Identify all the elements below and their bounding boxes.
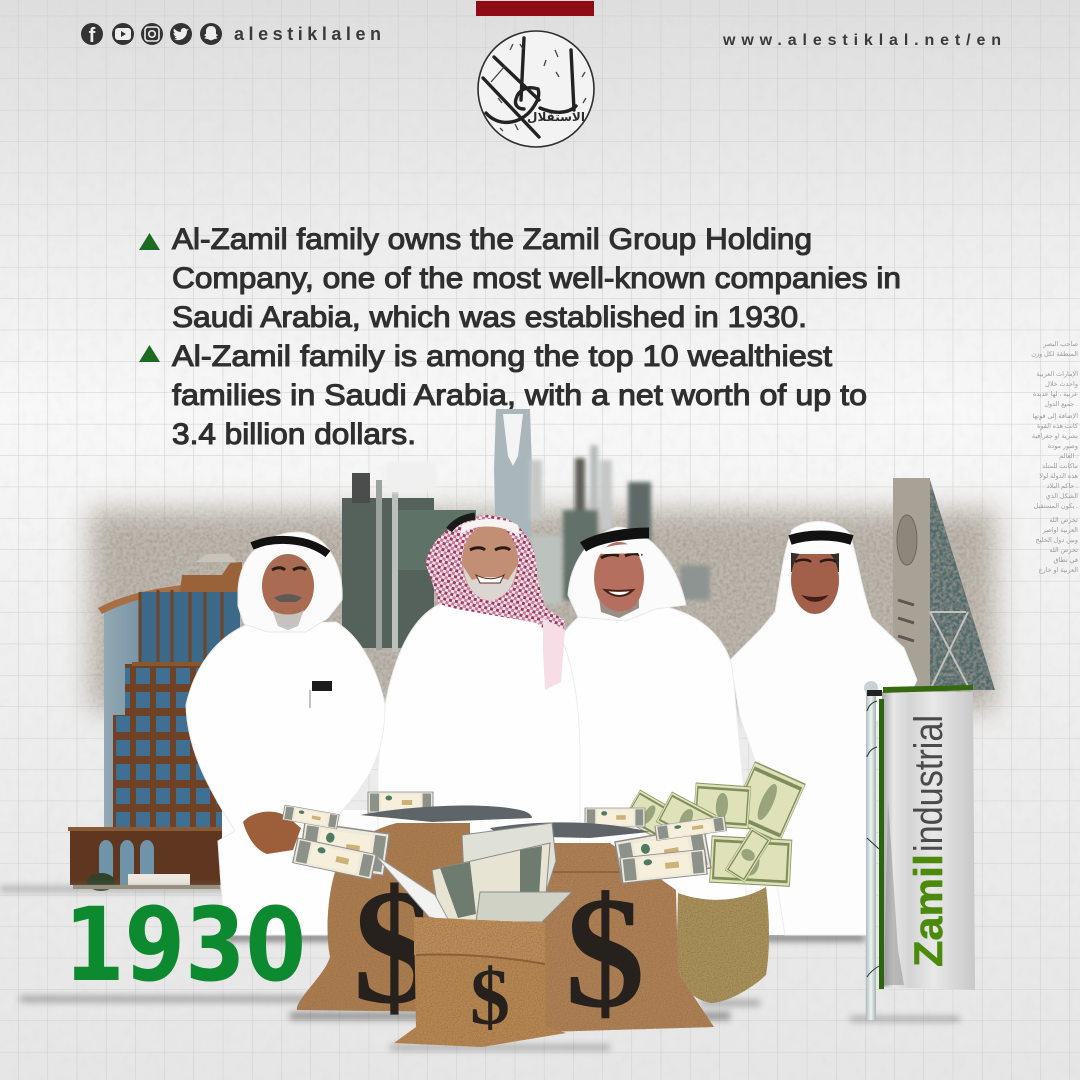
lower robes backdrop [222,810,867,935]
year 1930: 1930 [64,886,306,1005]
newspaper clipping text: يكون المستقبل . [1034,503,1078,510]
social media icons [81,23,222,47]
man 1 beard [272,610,304,630]
newspaper clipping text: العالم . [1059,453,1078,460]
logo: calligraphic roundel [478,31,594,147]
newspaper clipping text [1031,341,1079,574]
man 2 shemagh tail [543,618,565,690]
bullet icon 1 [139,233,160,250]
olive cash sack [623,762,805,1003]
skyline: Faisaliah tower [893,478,995,690]
olive banknotes [623,762,805,886]
hotel crown [180,562,242,592]
bullet 2 text [172,340,867,451]
man 3 agal [583,533,649,547]
newspaper clipping text: العربية اواصر [1042,527,1078,534]
man 4 robe and headdress [730,521,917,935]
man 4 face [791,546,839,614]
newspaper clipping text: الإضافة إلى قوتها [1032,413,1078,420]
man 4 [730,521,917,935]
small front bag [394,917,566,1047]
man 1 headdress [238,532,342,632]
man 2 robe [378,597,580,929]
newspaper clipping text: جميع الدول . [1044,401,1078,408]
social media icons: f [89,25,96,47]
newspaper clipping text: كانت هذه القوة [1037,423,1079,430]
newspaper clipping text: بشرية او جغرافية [1032,433,1078,440]
skyline: city haze [74,493,1011,726]
newspaper clipping text: تحرص الله [1049,547,1078,554]
flag brand text: industrial [907,715,951,852]
left bag: $ [353,855,435,1038]
money bags [282,792,726,1047]
bullet 1 text: Saudi Arabia, which was established in 1930. [172,301,807,334]
man 2 [378,515,580,929]
newspaper clipping text: حاكم البلاد . [1047,483,1078,490]
man 1 [186,532,385,935]
hotel curved glass tower [104,586,240,836]
center bills [375,823,572,923]
newspaper clipping text: وصور مودة [1048,443,1078,450]
man 1 pocket pen [312,681,332,691]
newspaper clipping text: المنطقة لكل وزن [1031,351,1078,358]
bullet text block [139,223,901,451]
newspaper clipping text: الشكل الذي [1046,493,1078,500]
skyline: distant towers [530,445,710,605]
man 1 agal [252,540,328,554]
social handle: alestiklalen [234,24,381,44]
man 1 hand [243,812,301,854]
man 2 shemagh [426,515,565,645]
skyline: twin towers [342,462,476,652]
flag pole [866,690,876,1020]
bullet 2 text: Al-Zamil family is among the top 10 wealthiest [172,340,833,373]
man 3 robe [545,602,746,935]
flag cloth [882,692,975,990]
bullet icon 2 [139,345,160,362]
left bag [297,823,470,1038]
newspaper clipping text: عربية ، لها عديدة [1033,391,1078,398]
newspaper clipping text: صاحب البصر [1042,341,1078,348]
man 1 robe [186,622,385,935]
man 3 face [594,542,644,614]
flag brand text [907,715,951,967]
man 1 face [262,554,314,618]
hotel building [68,554,243,891]
man 2 agal [449,516,475,530]
man 4 agal [790,536,852,540]
right bag [540,843,714,1041]
top red bar [476,1,594,16]
ground shadows [0,886,960,1050]
newspaper clipping text: تحرص الله [1049,517,1078,524]
newspaper clipping text: الإمارات العربية [1036,371,1078,378]
website url: www.alestiklal.net/en [722,32,1001,49]
bullet 1 text: Al-Zamil family owns the Zamil Group Holding [172,223,812,256]
newspaper clipping text: ماكانت للمتلد [1042,463,1078,470]
bullet 2 text: families in Saudi Arabia, with a net worth of up to [172,379,867,412]
newspaper clipping text: وبين دول الخليج [1035,537,1078,544]
top bill pile [282,792,726,883]
small front bag: $ [470,954,510,1042]
man 3 headdress [568,527,686,621]
olive sack body [676,887,769,1003]
hotel garden [87,873,115,891]
flag ties [867,701,879,977]
skyline: Kingdom Centre [494,409,532,559]
man 3 [545,527,746,935]
newspaper clipping text: هذه الدولة لولا [1039,473,1079,480]
man 2 face [462,524,518,600]
flag green trims [883,685,973,693]
zamil flag [864,681,975,1020]
bullet 1 text: Company, one of the most well-known companies in [172,262,901,295]
newspaper clipping text: واحدث خلال [1045,381,1078,388]
hotel podium [70,829,225,885]
bullet 2 text: 3.4 billion dollars. [172,418,416,451]
logo: calligraphic roundel: الاستقلال [527,110,585,124]
right bag: $ [565,863,645,1041]
man 4 hair [791,552,839,572]
newspaper clipping text: في نطاق [1054,557,1078,564]
bullet 1 text [172,223,901,334]
flag brand text: Zamil [907,854,951,967]
newspaper clipping text: العربية او خارج [1038,567,1078,574]
man 3 ghutra edge over forehead [592,544,646,569]
